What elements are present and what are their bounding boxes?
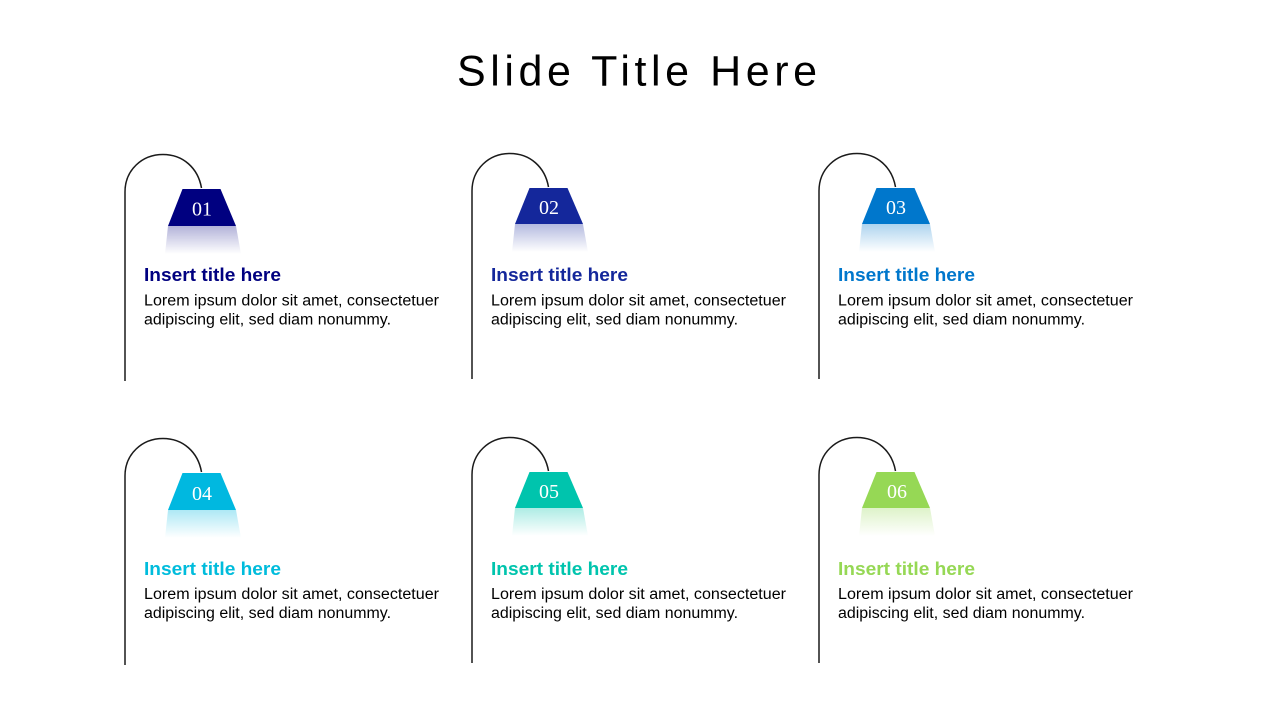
light glow 02 (512, 224, 588, 252)
heading 05: Insert title here (491, 559, 628, 579)
number 06: 06 (887, 481, 907, 503)
number 04: 04 (192, 483, 212, 505)
heading 03: Insert title here (838, 265, 975, 285)
body text 04: Lorem ipsum dolor sit amet, consectetuer (144, 586, 439, 603)
lamp shade 05 (515, 472, 583, 508)
lamp post line 05 (472, 438, 548, 663)
body text 05: adipiscing elit, sed diam nonummy. (491, 605, 738, 622)
body text 01 (144, 292, 439, 328)
panel: item 01 (125, 154, 439, 381)
light glow 06 (859, 508, 935, 536)
lamp shade 06 (862, 472, 930, 508)
body text 03: adipiscing elit, sed diam nonummy. (838, 312, 1085, 328)
lamp shade 01 (168, 189, 236, 226)
heading 06: Insert title here (838, 559, 975, 579)
body text 02 (491, 292, 786, 328)
lamp shade 02 (515, 188, 583, 224)
body text 02: Lorem ipsum dolor sit amet, consectetuer (491, 292, 786, 310)
number 01: 01 (192, 198, 212, 220)
lamp post line 03 (819, 154, 896, 379)
lamp post line 02 (472, 154, 548, 379)
lamp shade 04 (168, 473, 236, 510)
light glow 03 (859, 224, 935, 252)
body text 03: Lorem ipsum dolor sit amet, consectetuer (838, 292, 1133, 310)
panel: item 05 (472, 438, 786, 663)
heading 02: Insert title here (491, 265, 628, 285)
body text 01: adipiscing elit, sed diam nonummy. (144, 312, 391, 328)
body text 01: Lorem ipsum dolor sit amet, consectetuer (144, 292, 439, 310)
number 05: 05 (539, 481, 559, 503)
body text 04: adipiscing elit, sed diam nonummy. (144, 605, 391, 622)
lamp post line 04 (125, 438, 202, 665)
body text 04 (144, 586, 439, 622)
light glow 01 (165, 226, 241, 254)
panel: item 04 (125, 438, 439, 665)
body text 02: adipiscing elit, sed diam nonummy. (491, 312, 738, 328)
light glow 04 (165, 510, 241, 538)
panel: item 06 (819, 438, 1133, 663)
body text 06 (838, 586, 1133, 622)
panel: item 03 (819, 154, 1133, 379)
number 02: 02 (539, 197, 559, 219)
light glow 05 (512, 508, 588, 536)
body text 03 (838, 292, 1133, 328)
number 03: 03 (886, 197, 906, 219)
lamp post line 06 (819, 438, 896, 663)
panel: item 02 (472, 154, 786, 379)
title: Slide Title Here (457, 48, 817, 96)
body text 06: Lorem ipsum dolor sit amet, consectetuer (838, 586, 1133, 603)
lamp post line 01 (125, 154, 202, 381)
body text 05 (491, 586, 786, 622)
body text 05: Lorem ipsum dolor sit amet, consectetuer (491, 586, 786, 603)
body text 06: adipiscing elit, sed diam nonummy. (838, 605, 1085, 622)
heading 01: Insert title here (144, 265, 281, 285)
heading 04: Insert title here (144, 559, 281, 579)
lamp shade 03 (862, 188, 930, 224)
